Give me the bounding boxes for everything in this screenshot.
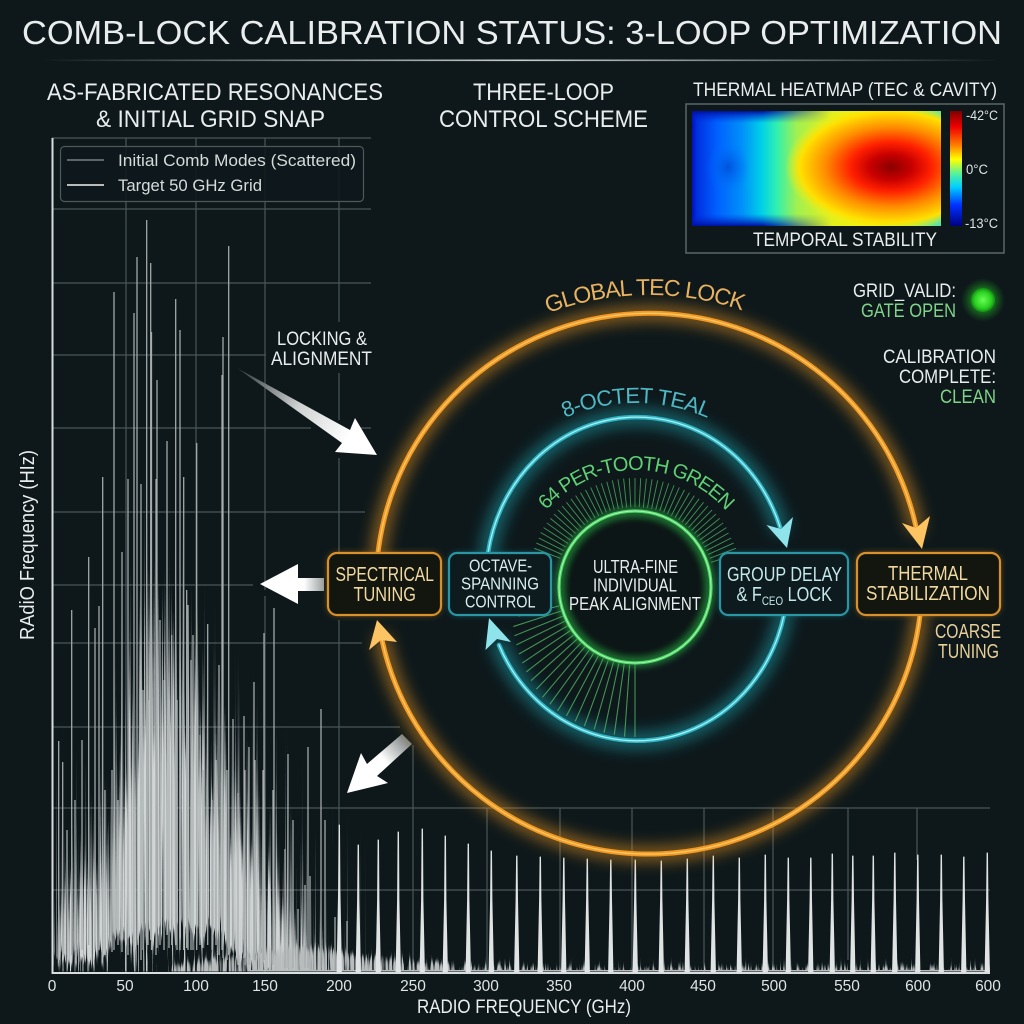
centre text	[569, 557, 701, 614]
arrow: locking into global ring	[237, 368, 377, 455]
colour bar labels: 0°C	[966, 162, 988, 177]
colour bar labels: -13°C	[965, 216, 998, 231]
aligned 50 GHz grid teeth	[337, 825, 990, 972]
legend: Target 50 GHz Grid	[118, 176, 262, 195]
outer orange loop	[378, 313, 920, 854]
y axis title: RAdiO Frequency (HIz)	[17, 450, 39, 640]
centre text: PEAK ALIGNMENT	[569, 594, 701, 614]
status: calibration complete: CLEAN	[940, 387, 996, 408]
x axis tick labels: 0	[48, 978, 57, 995]
loop label: 8-octet teal: 8-OCTET TEAL	[562, 388, 708, 418]
green per-tooth spokes	[513, 478, 738, 737]
x axis tick labels: 200	[326, 978, 352, 995]
box: thermal stabilization: STABILIZATION	[866, 583, 990, 605]
x axis tick labels: 50	[116, 978, 134, 995]
x axis tick labels: 100	[183, 978, 209, 995]
box: spectrical tuning: SPECTRICAL	[336, 564, 434, 586]
arrow: ring to comb teeth	[347, 734, 412, 793]
x axis tick labels: 600	[975, 978, 1001, 995]
callout: locking and alignment	[271, 328, 372, 370]
callout: locking and alignment: LOCKING &	[277, 328, 367, 350]
heatmap title: THERMAL HEATMAP (TEC & CAVITY)	[693, 80, 997, 101]
heatmap image	[692, 111, 941, 226]
green inner loop	[559, 511, 711, 663]
x axis tick labels: 150	[252, 978, 278, 995]
status: grid valid: GATE OPEN	[861, 301, 956, 322]
label: coarse tuning: COARSE	[935, 621, 1001, 643]
label: coarse tuning: TUNING	[938, 641, 999, 663]
box: spectrical tuning: TUNING	[354, 584, 416, 606]
heading: three-loop control scheme: CONTROL SCHEME	[439, 106, 648, 133]
legend: Initial Comb Modes (Scattered)	[118, 151, 356, 170]
box: thermal stabilization	[857, 553, 1000, 615]
centre text: ULTRA-FINE	[593, 557, 678, 577]
box: octave-spanning control	[449, 553, 551, 615]
centre text: INDIVIDUAL	[593, 576, 677, 596]
status: calibration complete	[883, 347, 996, 408]
legend	[60, 146, 364, 202]
x axis tick labels: 550	[834, 978, 860, 995]
label: coarse tuning	[935, 621, 1001, 663]
thermal heatmap panel	[686, 80, 1004, 253]
box: group delay and fceo lock: CEO	[762, 594, 783, 608]
dense scattered comb modes	[40, 610, 990, 1024]
title: COMB-LOCK CALIBRATION STATUS: 3-LOOP OPTIMIZATION	[22, 14, 1002, 51]
icon: green status LED	[961, 278, 1005, 322]
heading: three-loop control scheme	[439, 79, 648, 133]
loop label: global TEC lock: GLOBAL TEC LOCK	[546, 279, 746, 311]
status: calibration complete: COMPLETE:	[899, 367, 996, 388]
status: grid valid: GRID_VALID:	[853, 281, 956, 302]
three-loop control diagram	[324, 279, 1004, 872]
colour bar labels	[965, 108, 998, 231]
colour bar	[950, 111, 962, 226]
box: octave-spanning control: OCTAVE-	[469, 556, 532, 576]
teal arrowheads	[486, 517, 793, 650]
x axis tick labels: 450	[690, 978, 716, 995]
status: grid valid	[853, 281, 956, 322]
x axis tick labels: 250	[400, 978, 426, 995]
heatmap caption: TEMPORAL STABILITY	[753, 230, 937, 251]
x axis tick labels	[48, 978, 1001, 995]
box: thermal stabilization: THERMAL	[888, 563, 968, 585]
box: spectrical tuning	[328, 553, 441, 615]
box: group delay and fceo lock: LOCK	[783, 584, 833, 606]
heading: as-fabricated resonances: AS-FABRICATED RESONANCES	[47, 79, 383, 106]
x axis tick labels: 300	[473, 978, 499, 995]
orange arrowheads	[369, 516, 930, 650]
status: calibration complete: CALIBRATION	[883, 347, 996, 368]
chart grid	[52, 138, 990, 972]
x axis tick labels: 400	[619, 978, 645, 995]
box: group delay and fceo lock	[720, 553, 848, 615]
x axis title: RADIO FREQUENCY (GHz)	[417, 997, 631, 1018]
x axis tick labels: 350	[546, 978, 572, 995]
heading: as-fabricated resonances: & INITIAL GRID SNAP	[96, 106, 325, 133]
heading: as-fabricated resonances	[47, 79, 383, 133]
x axis tick labels: 500	[761, 978, 787, 995]
box: group delay and fceo lock: GROUP DELAY	[727, 564, 842, 586]
x axis tick labels: 600	[905, 978, 931, 995]
box: octave-spanning control: CONTROL	[465, 592, 536, 612]
chart axes	[52, 138, 990, 973]
loop label: 64 per-tooth green: 64 PER-TOOTH GREEN	[539, 456, 735, 510]
colour bar labels: -42°C	[966, 108, 998, 123]
box: octave-spanning control: SPANNING	[461, 574, 539, 594]
tall initial comb mode lines	[59, 220, 347, 970]
teal loop	[488, 417, 784, 741]
heading: three-loop control scheme: THREE-LOOP	[473, 79, 614, 106]
box: group delay and fceo lock: & F	[736, 584, 768, 606]
arrow: spectrical tuning to chart	[260, 564, 324, 604]
callout: locking and alignment: ALIGNMENT	[271, 348, 372, 370]
